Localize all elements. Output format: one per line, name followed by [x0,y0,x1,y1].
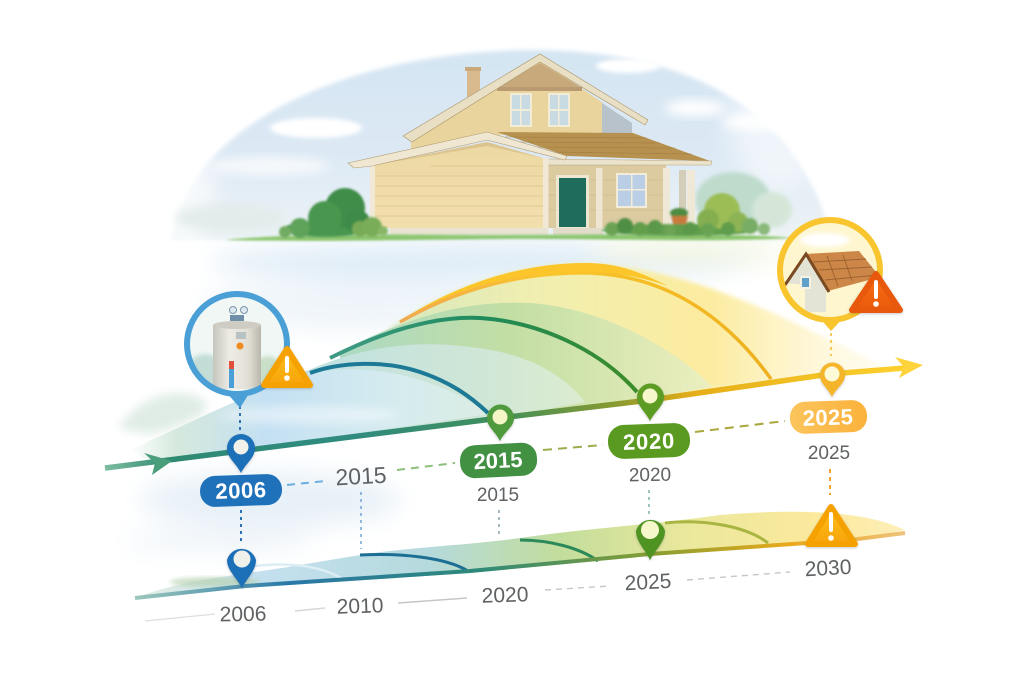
porch fascia [547,159,712,165]
yellow arc [400,273,771,379]
dashed connectors [145,333,831,621]
pin: bottom 2025 [636,520,665,560]
upper windows [510,93,570,127]
yellow area [385,264,885,410]
strip fill [135,512,905,598]
warning triangle [264,349,310,385]
callout: roof [780,220,900,331]
pill: 2020 [607,423,691,459]
pin: bottom 2006 [227,549,256,588]
warning triangle [852,274,900,310]
pill: 2020: 2020 [623,428,676,455]
water heater icon [192,306,278,389]
upper storey wall [411,60,603,150]
pill: 2006 [200,474,283,507]
upper roof trim [403,54,648,142]
upper arch chart [130,263,885,462]
pill: 2025 [789,400,868,434]
pin: 2020 [637,384,664,421]
wing trim [370,165,375,217]
blue area [298,344,585,440]
strip arcs [255,564,341,578]
lower strip chart [135,512,905,598]
lower-left watercolor wash [125,472,400,552]
blue arc [310,364,488,413]
pill: 2015: 2015 [473,447,523,474]
axis label 2025: 2025 [624,570,672,595]
water reflection band [200,240,790,329]
callout: water heater [187,294,310,408]
axis label 2010: 2010 [336,594,384,619]
porch wall [548,165,666,228]
door [556,175,589,228]
green area [340,303,713,425]
sky vignette [157,50,832,250]
axis label 2020: 2020 [481,583,529,608]
year label 2025: 2025 [808,443,850,464]
pill: 2015 [459,442,538,479]
hills left [118,393,207,434]
garage wing wall [375,142,543,228]
axis label 2006: 2006 [219,603,267,626]
flower pot [670,208,688,224]
pill: 2025: 2025 [802,404,854,431]
pin: 2025 [820,362,845,397]
year label 2015: 2015 [335,462,387,490]
grass strip [225,234,795,241]
foundation [390,228,548,235]
pin: 2015 [487,404,514,441]
porch post [596,168,602,228]
house [348,54,712,235]
roof house icon [785,233,880,312]
pill: 2006: 2006 [215,477,267,504]
left wash area [130,369,490,462]
chimney [465,67,481,100]
pin: 2006 [227,434,255,473]
shrubs [279,188,770,238]
green arc [330,318,637,392]
porch window [616,173,647,208]
columns [663,168,695,228]
background trees [695,172,792,228]
year label 2015 lower: 2015 [477,485,519,506]
warning: bottom 2030 [808,507,855,544]
yellow arc band [398,263,668,322]
main timeline arrow [105,357,923,475]
year label 2020: 2020 [629,465,671,486]
strip baseline [135,533,905,598]
shingle roof [497,132,710,161]
axis label 2030: 2030 [804,556,852,581]
